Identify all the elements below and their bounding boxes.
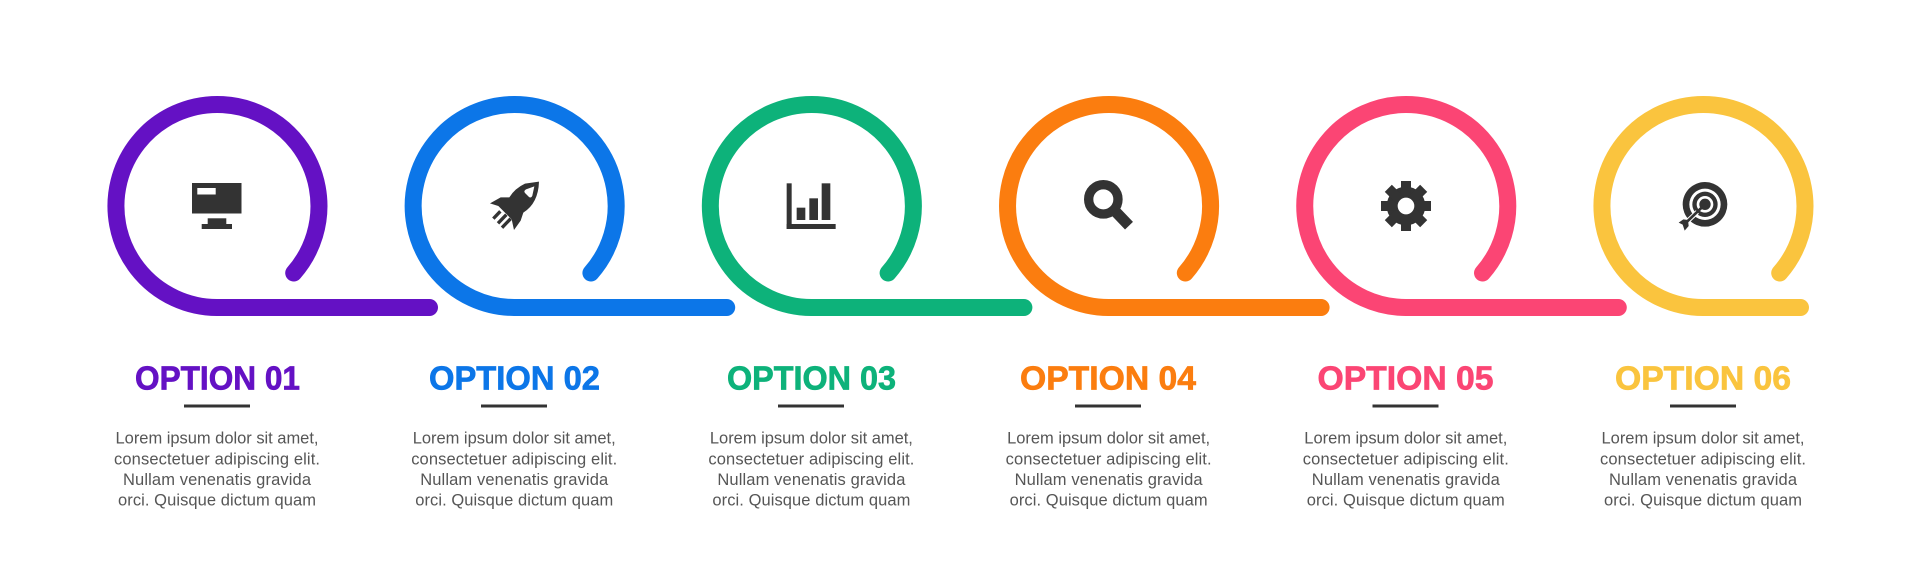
- text block: orci. Quisque dictum quam: [415, 492, 613, 510]
- text block: Lorem ipsum dolor sit amet,: [413, 430, 616, 448]
- text block: consectetuer adipiscing elit.: [411, 450, 617, 468]
- heading: option 04: OPTION 04: [1020, 360, 1197, 396]
- panel: option 06: [1600, 105, 1806, 509]
- text block: consectetuer adipiscing elit.: [114, 450, 320, 468]
- text block: orci. Quisque dictum quam: [712, 492, 910, 510]
- icon: gear: [1381, 181, 1431, 231]
- heading: option 01: OPTION 01: [135, 360, 300, 396]
- curved line: pink: [1305, 105, 1618, 307]
- panel: option 03: [708, 105, 1024, 509]
- divider: [1372, 404, 1438, 408]
- curved line: yellow: [1602, 105, 1805, 307]
- text block: [114, 430, 320, 510]
- curved line: blue: [413, 105, 727, 308]
- panel: option 02: [411, 105, 727, 510]
- heading: option 05: OPTION 05: [1318, 360, 1494, 396]
- divider: [1670, 404, 1736, 408]
- text block: orci. Quisque dictum quam: [1307, 492, 1505, 510]
- panel: option 01: [114, 105, 430, 510]
- text block: consectetuer adipiscing elit.: [1600, 450, 1806, 468]
- text block: orci. Quisque dictum quam: [118, 492, 316, 510]
- text block: Nullam venenatis gravida: [123, 471, 312, 489]
- text block: Lorem ipsum dolor sit amet,: [1007, 430, 1210, 448]
- text block: Lorem ipsum dolor sit amet,: [1304, 430, 1507, 448]
- curved line: green: [710, 105, 1024, 307]
- text block: consectetuer adipiscing elit.: [1303, 450, 1509, 468]
- text block: Lorem ipsum dolor sit amet,: [116, 430, 318, 448]
- text block: consectetuer adipiscing elit.: [708, 450, 914, 468]
- text block: Nullam venenatis gravida: [1609, 471, 1798, 489]
- text block: orci. Quisque dictum quam: [1010, 492, 1208, 510]
- divider: [481, 404, 547, 408]
- divider: [1075, 404, 1141, 408]
- curved line: orange: [1008, 105, 1321, 308]
- heading: option 03: OPTION 03: [727, 360, 896, 396]
- text block: orci. Quisque dictum quam: [1604, 492, 1802, 510]
- curved line: purple: [116, 105, 430, 308]
- icon: target: [1679, 182, 1727, 231]
- text block: Nullam venenatis gravida: [420, 471, 609, 489]
- divider: [184, 404, 250, 408]
- divider: [778, 404, 844, 408]
- panel: option 04: [1006, 105, 1321, 510]
- icon: rocket: [490, 182, 539, 230]
- text block: Lorem ipsum dolor sit amet,: [1602, 430, 1804, 448]
- text block: [708, 430, 914, 510]
- heading: option 02: OPTION 02: [429, 360, 600, 396]
- icon: monitor: [192, 183, 242, 229]
- text block: [1303, 430, 1509, 510]
- heading: option 06: OPTION 06: [1615, 360, 1791, 396]
- text block: [411, 430, 617, 510]
- icon: magnifier: [1089, 185, 1129, 226]
- icon: bar chart: [787, 183, 836, 229]
- panel: option 05: [1303, 105, 1618, 509]
- text block: Nullam venenatis gravida: [1015, 471, 1203, 489]
- text block: [1006, 430, 1212, 510]
- text block: Nullam venenatis gravida: [1312, 471, 1501, 489]
- text block: [1600, 430, 1806, 510]
- text block: consectetuer adipiscing elit.: [1006, 450, 1212, 468]
- text block: Nullam venenatis gravida: [717, 471, 906, 489]
- text block: Lorem ipsum dolor sit amet,: [710, 430, 913, 448]
